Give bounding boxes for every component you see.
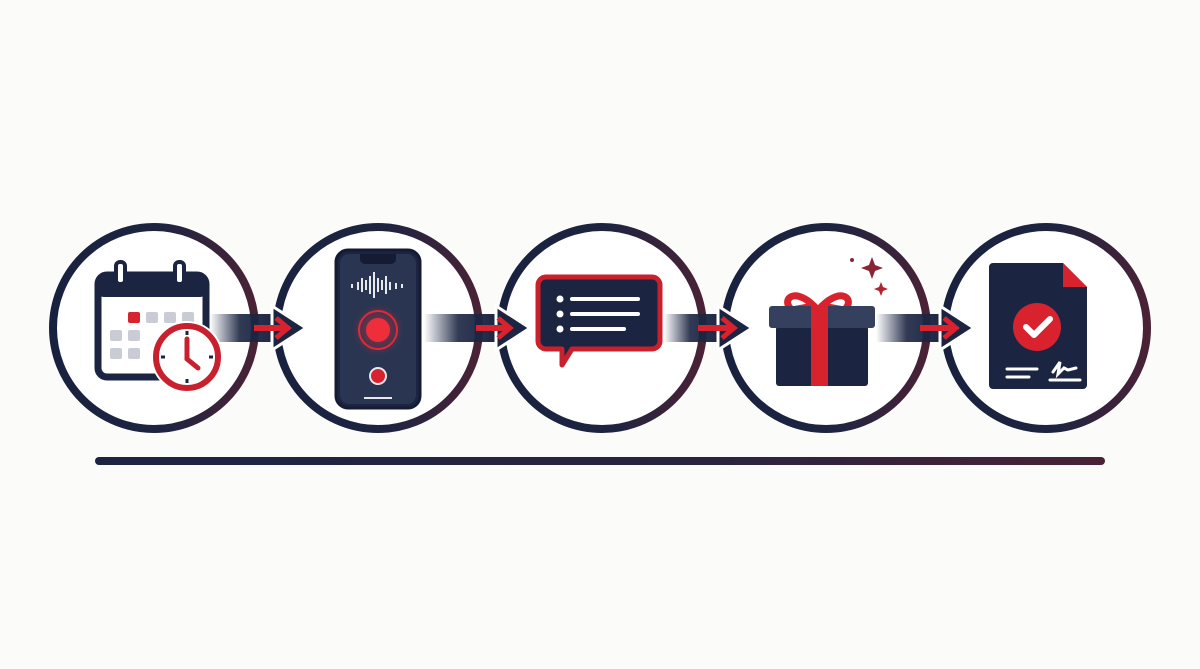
icon: chat bubble — [538, 277, 660, 365]
ring 4 — [725, 227, 927, 429]
ring 5 — [945, 227, 1147, 429]
icon: phone recording — [336, 250, 420, 408]
icon: calendar with clock — [98, 262, 223, 393]
arrow 1 — [210, 306, 306, 350]
icon: gift box — [769, 257, 888, 386]
ring 2 — [277, 227, 479, 429]
ring 3 — [501, 227, 703, 429]
arrow 2 — [424, 306, 530, 350]
icon: signed document — [989, 263, 1087, 389]
baseline — [95, 457, 1105, 465]
arrow 4 — [876, 306, 974, 350]
arrow 3 — [664, 306, 752, 350]
ring 1 — [53, 227, 255, 429]
